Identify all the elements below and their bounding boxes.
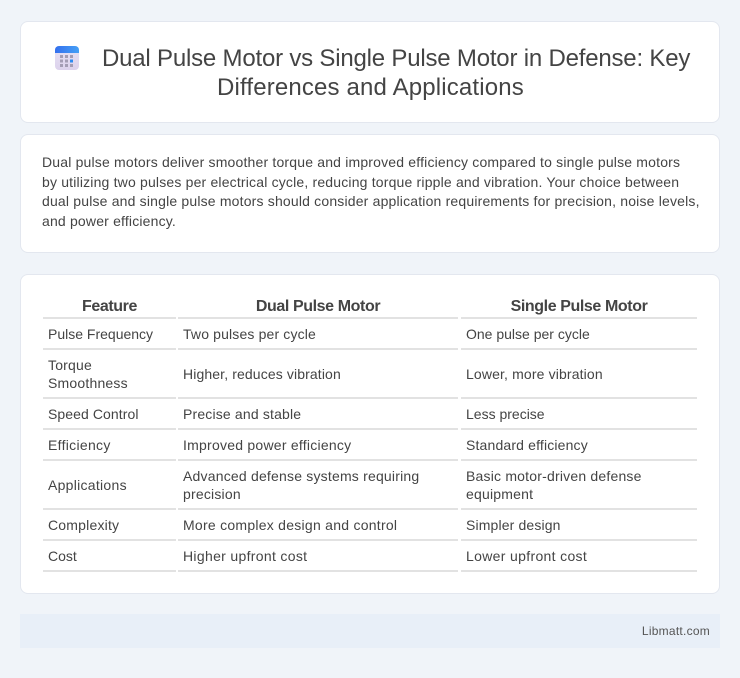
table: Less precise <box>466 406 545 422</box>
summary card <box>20 134 720 253</box>
table: Single Pulse Motor <box>511 298 647 315</box>
row: Torque Smoothness: Torque <box>48 357 92 373</box>
icon: calendar <box>55 46 79 70</box>
title: Differences and Applications <box>217 74 524 101</box>
summary text: Dual pulse motors deliver smoother torque and improved efficiency compared to single pulse motors <box>42 154 680 170</box>
title: Dual Pulse Motor vs Single Pulse Motor in Defense: Key <box>102 45 690 72</box>
table: precision <box>183 486 241 502</box>
summary text: dual pulse and single pulse motors should consider application requirements for precision, noise levels, <box>42 193 700 209</box>
table <box>43 298 697 572</box>
header card <box>20 21 720 123</box>
summary text: by utilizing two pulses per electrical cycle, reducing torque ripple and vibration. Your choice between <box>42 174 679 190</box>
table: Precise and stable <box>183 406 301 422</box>
row: Efficiency: Efficiency <box>48 437 111 453</box>
table: Higher, reduces vibration <box>183 366 341 382</box>
summary text <box>42 154 700 229</box>
table: One pulse per cycle <box>466 326 590 342</box>
row: Torque Smoothness: Smoothness <box>48 375 128 391</box>
row: Complexity: Complexity <box>48 517 119 533</box>
table: equipment <box>466 486 533 502</box>
table: Two pulses per cycle <box>183 326 316 342</box>
footer bar <box>20 614 720 648</box>
summary text: and power efficiency. <box>42 212 176 228</box>
row: Speed Control: Speed Control <box>48 406 139 422</box>
table: Lower, more vibration <box>466 366 603 382</box>
row: Applications: Applications <box>48 477 127 493</box>
row: Pulse Frequency: Pulse Frequency <box>48 326 153 342</box>
row: Torque Smoothness <box>48 357 128 391</box>
table: Dual Pulse Motor <box>256 298 380 315</box>
table: Improved power efficiency <box>183 437 351 453</box>
table header: Feature <box>82 298 137 315</box>
table: Basic motor-driven defense <box>466 468 642 484</box>
table: Advanced defense systems requiring <box>183 468 419 484</box>
title <box>102 45 690 101</box>
table: Higher upfront cost <box>183 548 307 564</box>
table: Simpler design <box>466 517 561 533</box>
table card <box>20 274 720 594</box>
table: Standard efficiency <box>466 437 588 453</box>
row: Cost: Cost <box>48 548 77 564</box>
table: Lower upfront cost <box>466 548 587 564</box>
table: More complex design and control <box>183 517 397 533</box>
footer text: Libmatt.com <box>642 624 710 638</box>
